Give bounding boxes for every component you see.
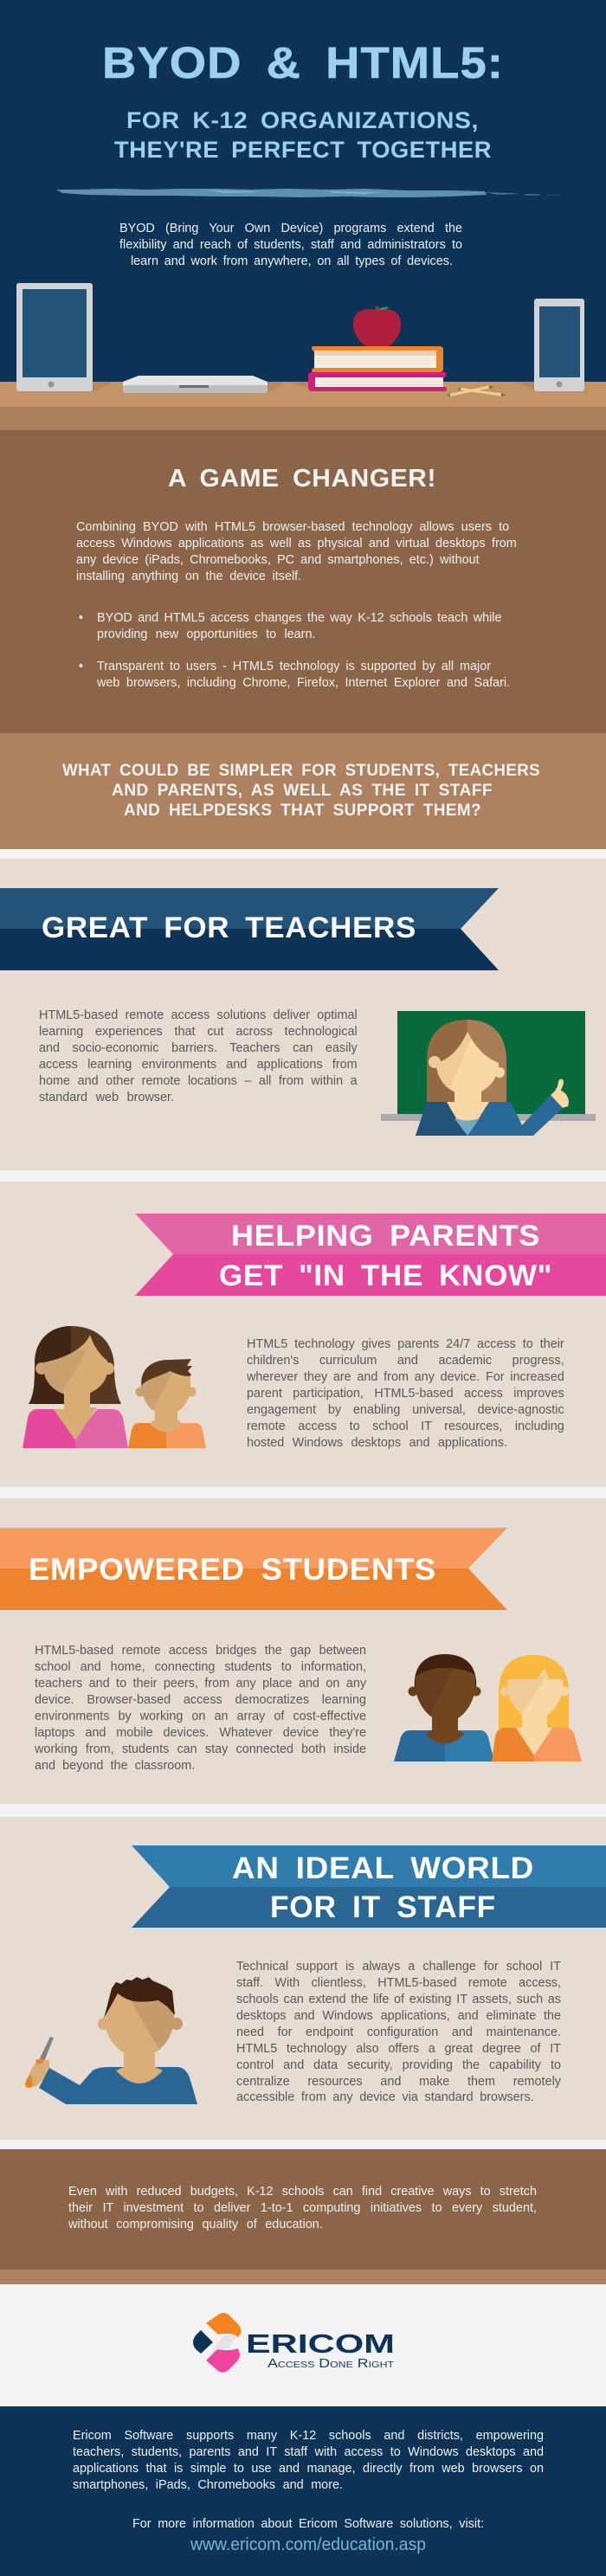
paragraph: parent participation, HTML5-based access improves — [247, 1386, 564, 1401]
panel: helping parents — [0, 1182, 606, 1487]
logo mark — [193, 2313, 241, 2373]
icon: smartphone — [534, 299, 584, 391]
panel: a game changer: • — [78, 659, 83, 673]
paragraph: school and home, connecting students to information, — [35, 1659, 366, 1674]
illustration: girl student — [492, 1655, 582, 1761]
illustration: mother — [23, 1326, 128, 1448]
paragraph: standard web browser. — [39, 1090, 174, 1104]
panel: hero header — [0, 0, 606, 430]
paragraph: access Windows applications as well as physical and virtual desktops from — [76, 536, 517, 551]
bullet 2 — [78, 659, 510, 690]
panel: great for teachers — [0, 859, 606, 1170]
paragraph: staff. With clientless, HTML5-based remote access, — [236, 1975, 561, 1990]
paragraph: HTML5-based remote access bridges the gap between — [35, 1643, 366, 1658]
ribbon heading: HELPING PARENTS — [231, 1220, 540, 1253]
paragraph: centralize resources and make them remotely — [236, 2074, 561, 2089]
paragraph: environments by working on an array of cost-effective — [35, 1709, 366, 1723]
paragraph: need for endpoint configuration and maintenance. — [236, 2025, 561, 2039]
company paragraph: smartphones, iPads, Chromebooks and more. — [73, 2477, 343, 2492]
paragraph: HTML5-based remote access solutions deliver optimal — [39, 1008, 358, 1022]
panel: budget note — [0, 2149, 606, 2284]
ribbon — [0, 1528, 507, 1610]
paragraph: Technical support is always a challenge for school IT — [236, 1959, 561, 1974]
subtitle — [114, 107, 492, 163]
ribbon — [135, 1214, 606, 1296]
paragraph: children's curriculum and academic progress, — [247, 1353, 564, 1368]
ribbon heading: FOR IT STAFF — [270, 1890, 496, 1924]
paragraph: remote access to school IT resources, including — [247, 1419, 564, 1433]
paragraph: their IT investment to deliver 1-to-1 computing initiatives to every student, — [68, 2200, 537, 2215]
ribbon heading: GREAT FOR TEACHERS — [42, 911, 416, 944]
paragraph — [236, 1959, 561, 2104]
heading: A GAME CHANGER! — [168, 465, 436, 493]
paragraph: engagement by enabling universal, device-agnostic — [247, 1402, 564, 1417]
website link: www.ericom.com/education.asp — [190, 2535, 426, 2554]
icon: apple — [353, 306, 401, 347]
intro text: learn and work from anywhere, on all types of devices. — [131, 254, 453, 268]
paragraph: desktops and Windows applications, and eliminate the — [236, 2008, 561, 2023]
bullet 2: Transparent to users - HTML5 technology is supported by all major — [97, 659, 491, 673]
paragraph — [247, 1336, 564, 1450]
bullet 1: providing new opportunities to learn. — [97, 627, 315, 641]
subtitle: THEY'RE PERFECT TOGETHER — [114, 137, 492, 163]
panel: empowered students — [0, 1498, 606, 1804]
illustration: son — [128, 1359, 206, 1448]
question heading: AND HELPDESKS THAT SUPPORT THEM? — [124, 802, 481, 820]
icon: closed laptop — [123, 376, 268, 393]
paragraph: wherever they are and from any device. For increased — [247, 1369, 564, 1384]
ribbon — [0, 888, 499, 970]
ribbon heading — [232, 1852, 534, 1924]
panel: footer — [0, 2406, 606, 2576]
intro text — [119, 221, 462, 268]
paragraph: hosted Windows desktops and applications. — [247, 1435, 507, 1450]
paragraph: teachers and to their peers, from any place and on any — [35, 1676, 366, 1690]
paragraph: without compromising quality of education. — [68, 2217, 323, 2231]
paragraph: working from, students can stay connected both inside — [35, 1742, 366, 1756]
paragraph: HTML5 technology gives parents 24/7 access to their — [247, 1336, 564, 1351]
panel: an ideal world for IT staff — [0, 1817, 606, 2140]
paragraph: installing anything on the device itself. — [76, 569, 301, 583]
ribbon heading: AN IDEAL WORLD — [232, 1852, 534, 1885]
question heading: AND PARENTS, AS WELL AS THE IT STAFF — [112, 782, 493, 800]
chalk stroke — [56, 189, 560, 197]
panel: Ericom logo — [0, 2284, 606, 2406]
ribbon — [132, 1845, 606, 1928]
logo wordmark — [246, 2328, 395, 2371]
title: BYOD & HTML5: — [102, 38, 504, 87]
bullet 1: BYOD and HTML5 access changes the way K-12 schools teach while — [97, 610, 501, 625]
paragraph: home and other remote locations – all from within a — [39, 1073, 358, 1088]
bullet 2: web browsers, including Chrome, Firefox, Internet Explorer and Safari. — [97, 675, 510, 690]
intro text: BYOD (Bring Your Own Device) programs extend the — [119, 221, 462, 235]
panel: a game changer: • — [78, 610, 83, 625]
paragraph: control and data security, providing the capability to — [236, 2058, 561, 2072]
company paragraph — [73, 2428, 544, 2492]
paragraph: and socio-economic barriers. Teachers can easily — [39, 1040, 358, 1055]
paragraph: accessible from any device via standard browsers. — [236, 2090, 534, 2104]
call to action: For more information about Ericom Software solutions, visit: — [132, 2516, 484, 2531]
paragraph: schools can extend the life of existing IT assets, such as — [236, 1992, 561, 2006]
panel: question banner — [0, 733, 606, 849]
panel: a game changer — [0, 430, 606, 733]
paragraph — [35, 1643, 366, 1773]
company paragraph: teachers, students, parents and IT staff with access to Windows desktops and — [73, 2444, 544, 2459]
question heading: WHAT COULD BE SIMPLER FOR STUDENTS, TEACHERS — [62, 762, 540, 780]
logo wordmark: ERICOM — [246, 2328, 395, 2359]
ribbon heading — [219, 1220, 552, 1292]
icon: stacked books — [308, 346, 447, 391]
paragraph: laptops and mobile devices. Whatever device they're — [35, 1725, 366, 1740]
company paragraph: applications that is simple to use and manage, directly from web browsers on — [73, 2461, 544, 2476]
paragraph: Even with reduced budgets, K-12 schools can find creative ways to stretch — [68, 2184, 537, 2199]
icon: pencils — [448, 386, 506, 396]
paragraph: access learning environments and applications from — [39, 1057, 358, 1072]
bullet 1 — [78, 610, 501, 641]
subtitle: FOR K-12 ORGANIZATIONS, — [126, 107, 479, 133]
logo wordmark: Access Done Right — [268, 2357, 394, 2371]
desk — [0, 382, 606, 430]
company paragraph: Ericom Software supports many K-12 schools and districts, empowering — [73, 2428, 544, 2443]
paragraph: HTML5 technology also offers a great degree of IT — [236, 2041, 561, 2056]
paragraph: learning experiences that cut across technological — [39, 1024, 358, 1039]
paragraph — [76, 519, 517, 583]
paragraph: and beyond the classroom. — [35, 1758, 195, 1773]
paragraph — [68, 2184, 537, 2231]
ribbon heading: EMPOWERED STUDENTS — [29, 1553, 436, 1587]
illustration: teacher at chalkboard — [381, 1011, 596, 1136]
ribbon heading: GET "IN THE KNOW" — [219, 1259, 552, 1292]
intro text: flexibility and reach of students, staff and administrators to — [119, 237, 462, 252]
paragraph: Combining BYOD with HTML5 browser-based technology allows users to — [76, 519, 509, 534]
icon: tablet — [16, 283, 93, 391]
paragraph: any device (iPads, Chromebooks, PC and smartphones, etc.) without — [76, 552, 480, 567]
question heading — [62, 762, 540, 820]
illustration: boy student — [394, 1654, 494, 1761]
illustration: IT technician with screwdriver — [25, 1977, 197, 2104]
paragraph — [39, 1008, 358, 1104]
paragraph: device. Browser-based access democratizes learning — [35, 1692, 366, 1707]
